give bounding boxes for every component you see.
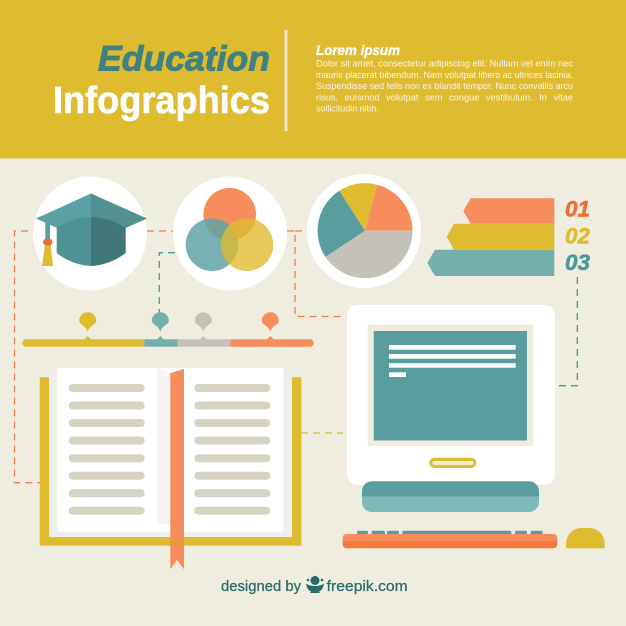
right page lines [194,384,270,515]
monitor body [347,305,555,485]
mouse [566,528,605,548]
screen text lines [389,345,516,377]
title: Infographics [53,80,270,122]
number 02: 02 [565,224,591,248]
arrow 02 [447,224,554,250]
intro text block: Suspendisse sed felis non ex blandit tempor. Nunc convallis arcu [316,81,573,91]
pin: teal [152,312,169,340]
icon: venn diagram [173,176,287,290]
screen [374,331,527,440]
intro text block: sollicitudin nibh. [316,104,379,114]
footer credit: freepik.com [327,578,408,595]
pin: yellow [79,312,96,340]
number 03: 03 [565,250,590,275]
illustration: computer [343,305,605,548]
illustration: open book [40,368,301,569]
chart: pie [307,174,421,288]
pin: grey [195,312,212,340]
intro text block: Dolor sit amet, consectetur adipiscing elit. Nullam vel enim nec [316,59,573,69]
icon: freepik logo [306,576,324,593]
book pages [57,368,283,532]
intro text block: mauris placerat bibendum. Nam volutpat libero ac ultrices lacinia. [316,70,573,80]
pin: orange [262,312,279,340]
connector: teal dashed lines [159,253,577,386]
footer credit: designed by [221,579,302,595]
intro text block [316,42,573,114]
monitor button [429,458,476,468]
arrow 01 [463,198,554,224]
bookmark ribbon [170,369,184,569]
book cover [40,377,301,546]
header divider [284,30,288,131]
icon: graduation cap [33,176,147,290]
footer credit [221,576,408,595]
title: Education [98,40,270,78]
ranked list arrows [427,196,591,276]
number 01: 01 [565,196,590,222]
title [53,40,270,122]
screen frame [368,325,533,446]
header band [0,0,626,158]
left page lines [69,384,145,515]
monitor stand [362,481,539,512]
arrow 03 [427,250,554,276]
timeline [22,312,314,347]
intro text block: Lorem ipsum [316,42,400,58]
connector: orange dashed lines [14,231,344,483]
keyboard [343,531,557,548]
intro text block: risus, euismod volutpat sem congue vestibulum. In vitae [316,92,573,102]
connector: yellow dashed line [301,432,343,434]
